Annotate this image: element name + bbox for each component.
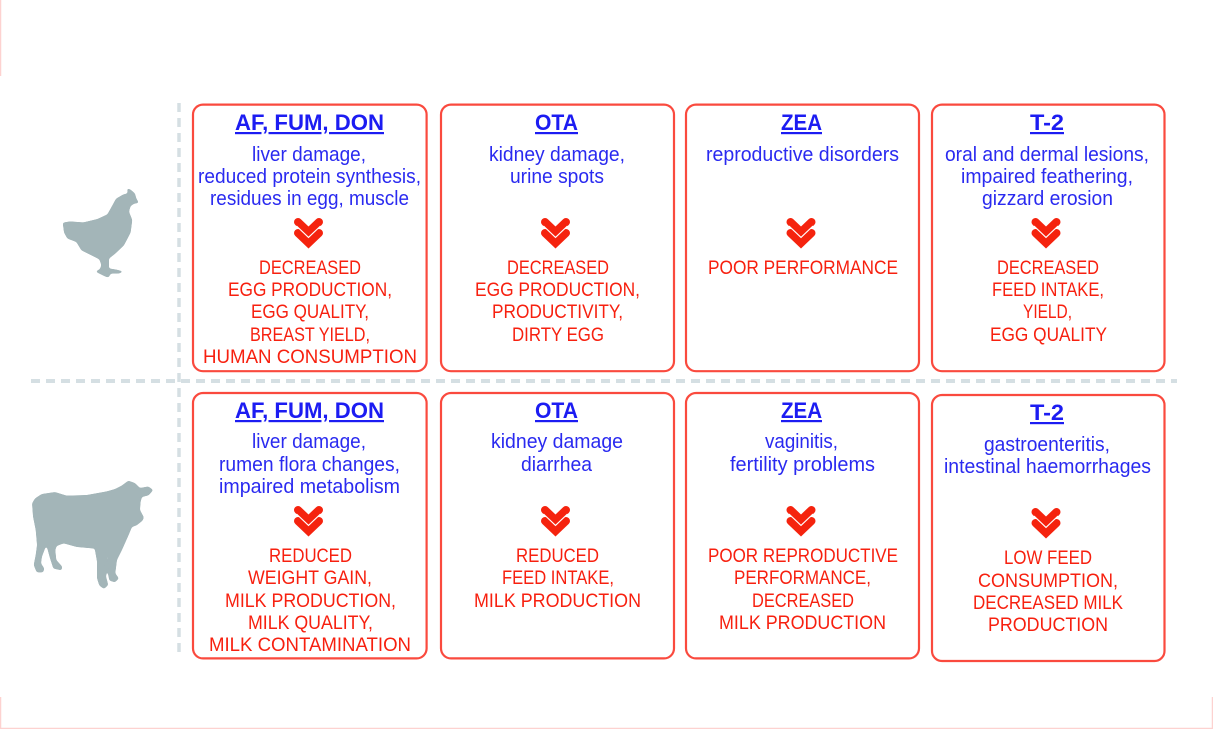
outcomes text: FEED INTAKE, [502,568,614,589]
outcomes text [474,546,641,612]
symptoms text: gastroenteritis, [984,434,1110,456]
symptoms text: residues in egg, muscle [210,188,409,210]
outcomes text: MILK PRODUCTION [719,613,886,634]
symptoms text: kidney damage [491,431,623,453]
heading: AF, FUM, DON: AF, FUM, DON [235,110,384,135]
outcomes text: MILK PRODUCTION, [225,591,396,612]
panel: cattle T-2 [932,395,1164,661]
outcomes text [475,258,640,346]
panel: poultry ZEA [686,105,919,371]
outcomes text: POOR PERFORMANCE [708,258,898,279]
symptoms text: reproductive disorders [706,144,899,166]
outcomes text: WEIGHT GAIN, [248,568,372,589]
symptoms text [489,144,625,188]
symptoms text [944,434,1151,478]
icon: double chevron [1034,512,1058,533]
outcomes text: MILK PRODUCTION [474,591,641,612]
symptoms text: oral and dermal lesions, [945,144,1149,166]
symptoms text: impaired metabolism [219,476,400,498]
heading: ZEA: ZEA [781,398,822,423]
outcomes text: EGG QUALITY, [251,302,369,323]
outcomes text [990,258,1107,346]
outcomes text: PRODUCTIVITY, [492,302,623,323]
outcomes text [203,258,417,368]
panel: poultry OTA [441,105,674,371]
outcomes text: MILK QUALITY, [248,613,373,634]
outcomes text: DECREASED [997,258,1099,279]
heading: OTA: OTA [535,110,578,135]
outcomes text: MILK CONTAMINATION [209,635,411,656]
outcomes text: POOR REPRODUCTIVE [708,546,898,567]
outcomes text [209,546,411,656]
symptoms text: impaired feathering, [961,166,1133,188]
symptoms text [198,144,421,210]
symptoms text [730,431,875,476]
heading: OTA: OTA [535,398,578,423]
icon: double chevron [296,510,320,531]
outcomes text: BREAST YIELD, [250,325,370,346]
symptoms text [491,431,623,476]
icon: hen silhouette [63,188,139,278]
symptoms text: rumen flora changes, [219,454,400,476]
outcomes text: EGG PRODUCTION, [228,280,392,301]
symptoms text: liver damage, [252,431,366,453]
icon: double chevron [789,222,813,243]
panel: cattle AF, FUM, DON [193,393,427,658]
outcomes text: HUMAN CONSUMPTION [203,347,417,368]
outcomes text: DECREASED [259,258,361,279]
symptoms text: fertility problems [730,454,875,476]
symptoms text: vaginitis, [765,431,838,453]
symptoms text: diarrhea [521,454,593,476]
outcomes text: EGG QUALITY [990,325,1107,346]
symptoms text: gizzard erosion [982,188,1113,210]
icon: double chevron [544,222,568,243]
outcomes text: DECREASED [752,591,854,612]
outcomes text: DECREASED MILK [973,593,1123,614]
symptoms text: liver damage, [252,144,366,166]
outcomes text: DECREASED [507,258,609,279]
icon: double chevron [789,510,813,531]
outcomes text: CONSUMPTION, [978,571,1118,592]
outcomes text: PRODUCTION [988,615,1108,636]
heading: T-2: T-2 [1030,110,1064,135]
icon: double chevron [544,510,568,531]
symptoms text [219,431,400,498]
icon: double chevron [1034,222,1058,243]
symptoms text: urine spots [510,166,604,188]
outcomes text: LOW FEED [1004,548,1092,569]
panel: poultry AF, FUM, DON [193,105,427,371]
symptoms text: reduced protein synthesis, [198,166,421,188]
outcomes text [973,548,1123,636]
heading: AF, FUM, DON: AF, FUM, DON [235,398,384,423]
panel: poultry T-2 [932,105,1164,371]
outcomes text [708,546,898,634]
outcomes text: PERFORMANCE, [734,568,871,589]
outcomes text: EGG PRODUCTION, [475,280,640,301]
symptoms text [945,144,1149,210]
icon: double chevron [296,222,320,243]
outcomes text: FEED INTAKE, [992,280,1104,301]
heading: ZEA: ZEA [781,110,822,135]
outcomes text: YIELD, [1023,302,1072,323]
outcomes text: REDUCED [516,546,599,567]
symptoms text: kidney damage, [489,144,625,166]
panel: cattle OTA [441,393,674,658]
symptoms text: intestinal haemorrhages [944,456,1151,478]
icon: cow silhouette [32,481,153,589]
panel: cattle ZEA [686,393,919,658]
outcomes text: REDUCED [269,546,352,567]
heading: T-2: T-2 [1030,400,1064,425]
outcomes text: DIRTY EGG [512,325,604,346]
